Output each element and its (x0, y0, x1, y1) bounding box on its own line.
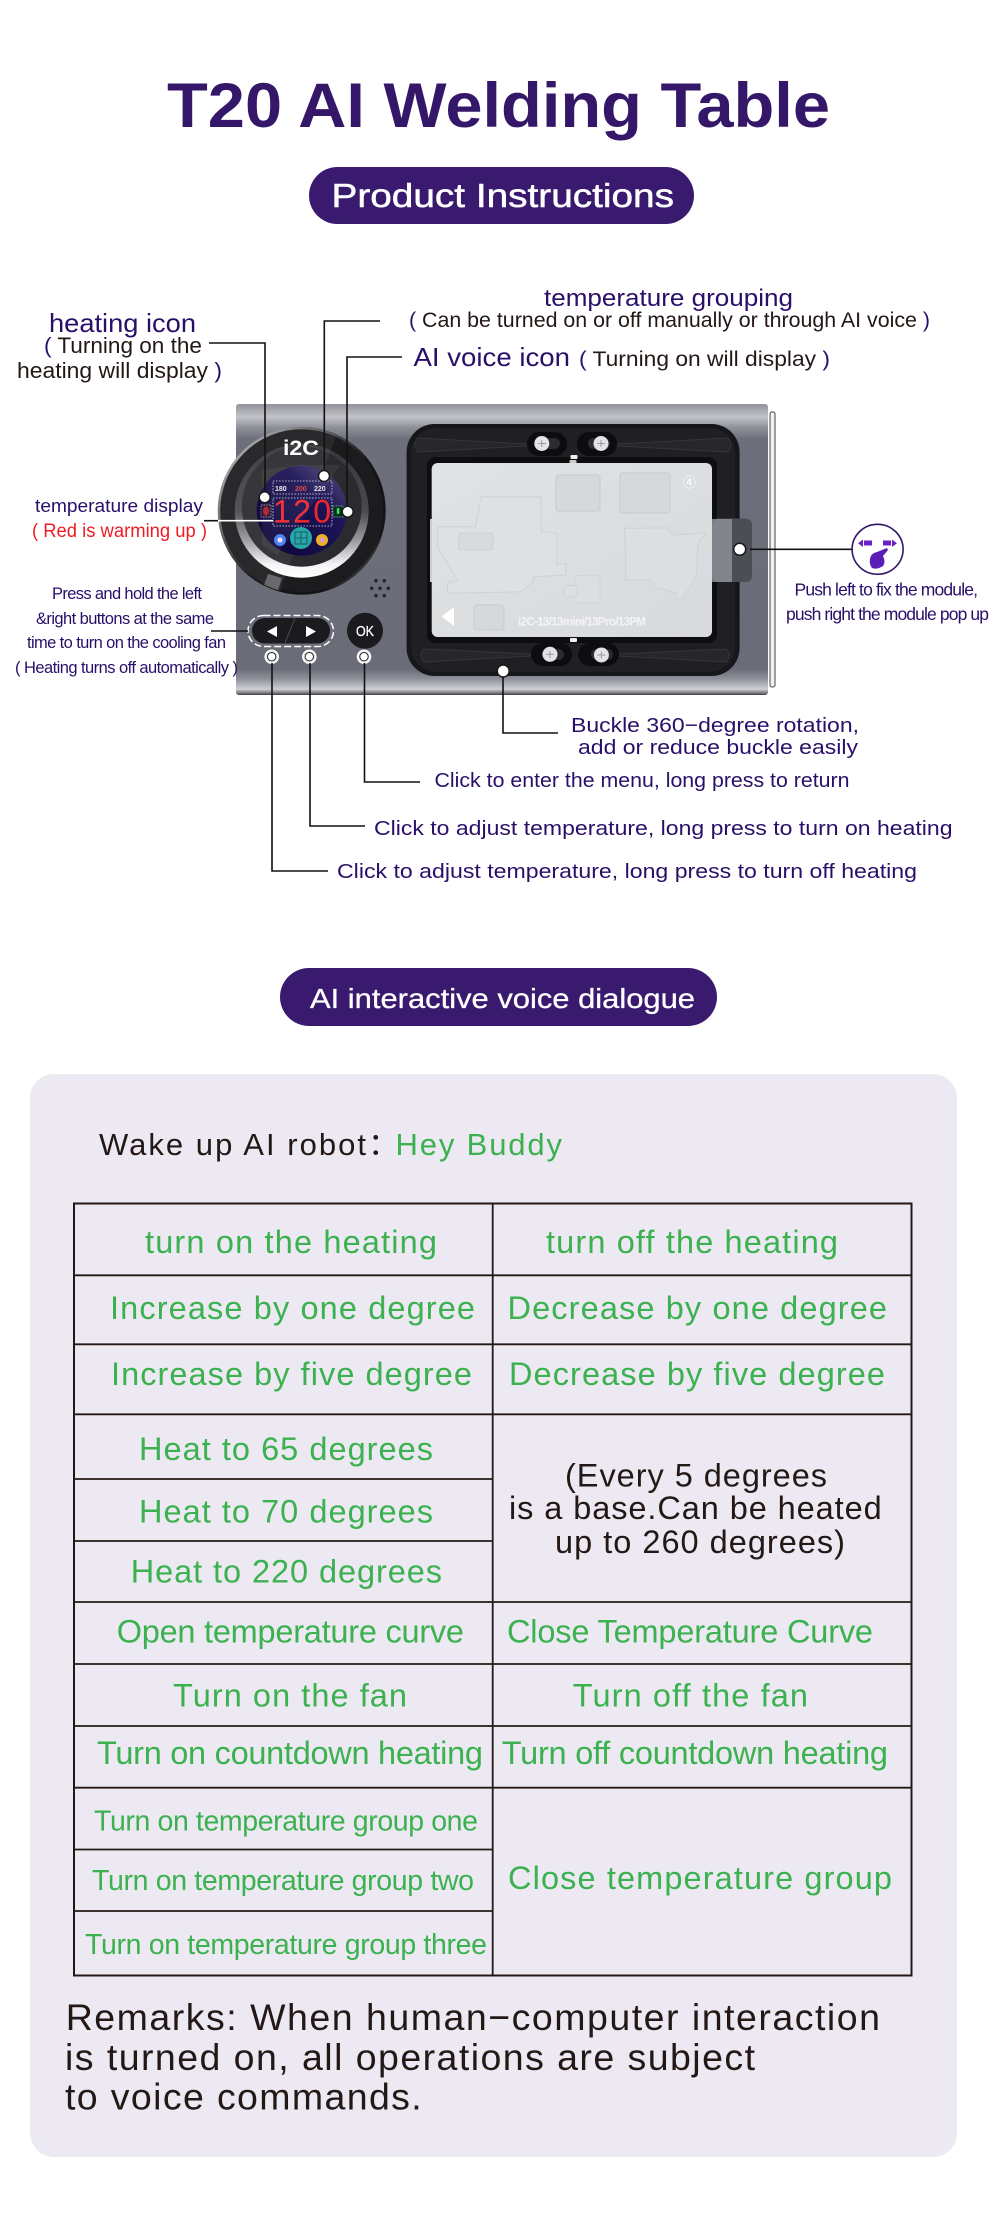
commands: right column: Decrease by one degree (508, 1290, 887, 1326)
blue group icon (274, 534, 286, 546)
module plate (432, 463, 712, 637)
callout: OK button: Click to enter the menu, long press to return (434, 769, 850, 792)
commands: right column: turn off the heating (546, 1224, 838, 1260)
commands: right column: Close temperature group (508, 1860, 892, 1896)
callout: temperature grouping (318, 285, 930, 482)
commands: left column: Heat to 65 degrees (139, 1431, 433, 1467)
module tray (407, 424, 740, 676)
callout: right arrow button: Click to adjust temperature, long press to turn on heating (374, 817, 952, 840)
remarks: Remarks: When human−computer interaction (66, 1996, 880, 2038)
callout: heating icon: heating will display ) (17, 358, 222, 383)
commands: left column (85, 1224, 487, 1961)
commands: right column (502, 1224, 892, 1896)
device side rail (770, 412, 775, 687)
callout: buckle rotation: add or reduce buckle easily (578, 736, 859, 759)
temperature group values (273, 481, 332, 494)
heading pill: Product Instructions: Product Instructions (332, 177, 674, 214)
remarks: to voice commands. (65, 2075, 422, 2117)
module number: ④ (683, 475, 696, 490)
commands: left column: Turn on temperature group two (92, 1865, 474, 1897)
round screen (257, 466, 347, 556)
callout: temperature display: ( Red is warming up ) (32, 521, 207, 542)
teal centre icon (290, 527, 312, 549)
speaker holes (370, 579, 390, 598)
commands: left column: Turn on countdown heating (97, 1735, 483, 1771)
square cutouts (474, 473, 670, 630)
callout: right arrow button (303, 650, 952, 840)
heating icon (261, 505, 271, 517)
callout: buckle rotation (497, 665, 859, 759)
commands: left column: Increase by one degree (110, 1290, 475, 1326)
callout: heating icon: heating icon (49, 308, 196, 338)
yellow group icon (316, 534, 328, 546)
note: temperature base (509, 1458, 882, 1560)
panel: voice commands (30, 1074, 957, 2157)
note: temperature base: (Every 5 degrees (565, 1458, 827, 1494)
callout: cooling fan: &right buttons at the same (36, 610, 214, 628)
module arrow (442, 607, 454, 626)
small recesses (564, 576, 600, 603)
wake word: Wake up AI robot： (99, 1127, 399, 1162)
temperature group values: 220 (314, 486, 326, 493)
commands: left column: Heat to 70 degrees (139, 1494, 433, 1530)
bottom clamp rails (421, 649, 729, 662)
callout: slider push (734, 524, 989, 624)
commands: right column: Turn off countdown heating (502, 1735, 888, 1771)
callout: cooling fan (15, 585, 248, 677)
callout: buckle rotation: Buckle 360−degree rotation, (571, 714, 859, 737)
commands: left column: Open temperature curve (117, 1614, 464, 1650)
slider latch (430, 518, 752, 582)
callout: OK button (358, 650, 850, 792)
wake word: Hey Buddy (396, 1127, 562, 1162)
commands: left column: Turn on temperature group one (94, 1806, 478, 1838)
commands: left column: turn on the heating (145, 1224, 437, 1260)
commands: right column: Turn off the fan (573, 1678, 808, 1714)
note: temperature base: up to 260 degrees) (555, 1524, 845, 1560)
callout: slider push: Push left to fix the module, (794, 580, 978, 600)
device body (236, 404, 768, 695)
commands: left column: Turn on temperature group three (85, 1929, 487, 1961)
table grid (74, 1203, 912, 1976)
note: temperature base: is a base.Can be heated (509, 1490, 882, 1526)
callout: cooling fan: Press and hold the left (52, 585, 202, 603)
module model label: i2C-13/13mini/13Pro/13PM (518, 617, 646, 629)
commands: left column: Turn on the fan (173, 1678, 407, 1714)
heading pill: AI interactive voice dialogue (280, 968, 717, 1026)
commands: left column: Increase by five degree (111, 1356, 472, 1392)
temperature group values: 180 (275, 486, 287, 493)
remarks (65, 1996, 880, 2117)
temperature reading: 120 (273, 494, 331, 530)
callout: left arrow button (265, 650, 917, 883)
callout: temperature grouping: temperature grouping (544, 285, 793, 312)
heading pill: AI interactive voice dialogue: AI interactive voice dialogue (310, 983, 695, 1014)
callout: temperature display: temperature display (35, 496, 203, 516)
wake word (99, 1127, 562, 1162)
brand logo: i2C (283, 437, 319, 460)
remarks: is turned on, all operations are subject (65, 2036, 756, 2078)
callout: AI voice icon (342, 342, 830, 517)
product device illustration (200, 404, 775, 695)
icon: finger sliding left and right (852, 524, 903, 574)
callout: slider push: push right the module pop up (786, 604, 989, 624)
callout: heating icon: ( Turning on the (44, 333, 202, 358)
display knob (218, 426, 386, 595)
commands: left column: Heat to 220 degrees (131, 1554, 442, 1590)
callout: left arrow button: Click to adjust temperature, long press to turn off heating (337, 860, 917, 883)
commands: right column: Close Temperature Curve (507, 1614, 873, 1650)
bottom buckles (531, 643, 619, 666)
callout: temperature display (32, 496, 273, 542)
top clamp rails (415, 438, 731, 452)
callout: temperature grouping: ( Can be turned on or off manually or through AI voice ) (409, 309, 930, 332)
left board recess (438, 497, 566, 593)
command table (74, 1203, 912, 1976)
callout: heating icon (17, 308, 270, 503)
top buckles (527, 432, 617, 456)
OK button (347, 613, 383, 649)
arrow buttons (248, 616, 334, 646)
callout: AI voice icon: AI voice icon (414, 342, 570, 372)
commands: right column: Decrease by five degree (509, 1356, 885, 1392)
callout: AI voice icon: ( Turning on will display ) (579, 348, 830, 371)
title: T20 AI Welding Table (167, 71, 830, 141)
callout: cooling fan: ( Heating turns off automatically ) (15, 659, 238, 677)
right board recess (624, 528, 706, 600)
heading pill: Product Instructions (309, 167, 694, 224)
callout: cooling fan: time to turn on the cooling fan (27, 634, 226, 652)
temperature group values: 200 (295, 486, 307, 493)
AI voice icon (333, 506, 343, 517)
OK button: OK (356, 623, 374, 640)
